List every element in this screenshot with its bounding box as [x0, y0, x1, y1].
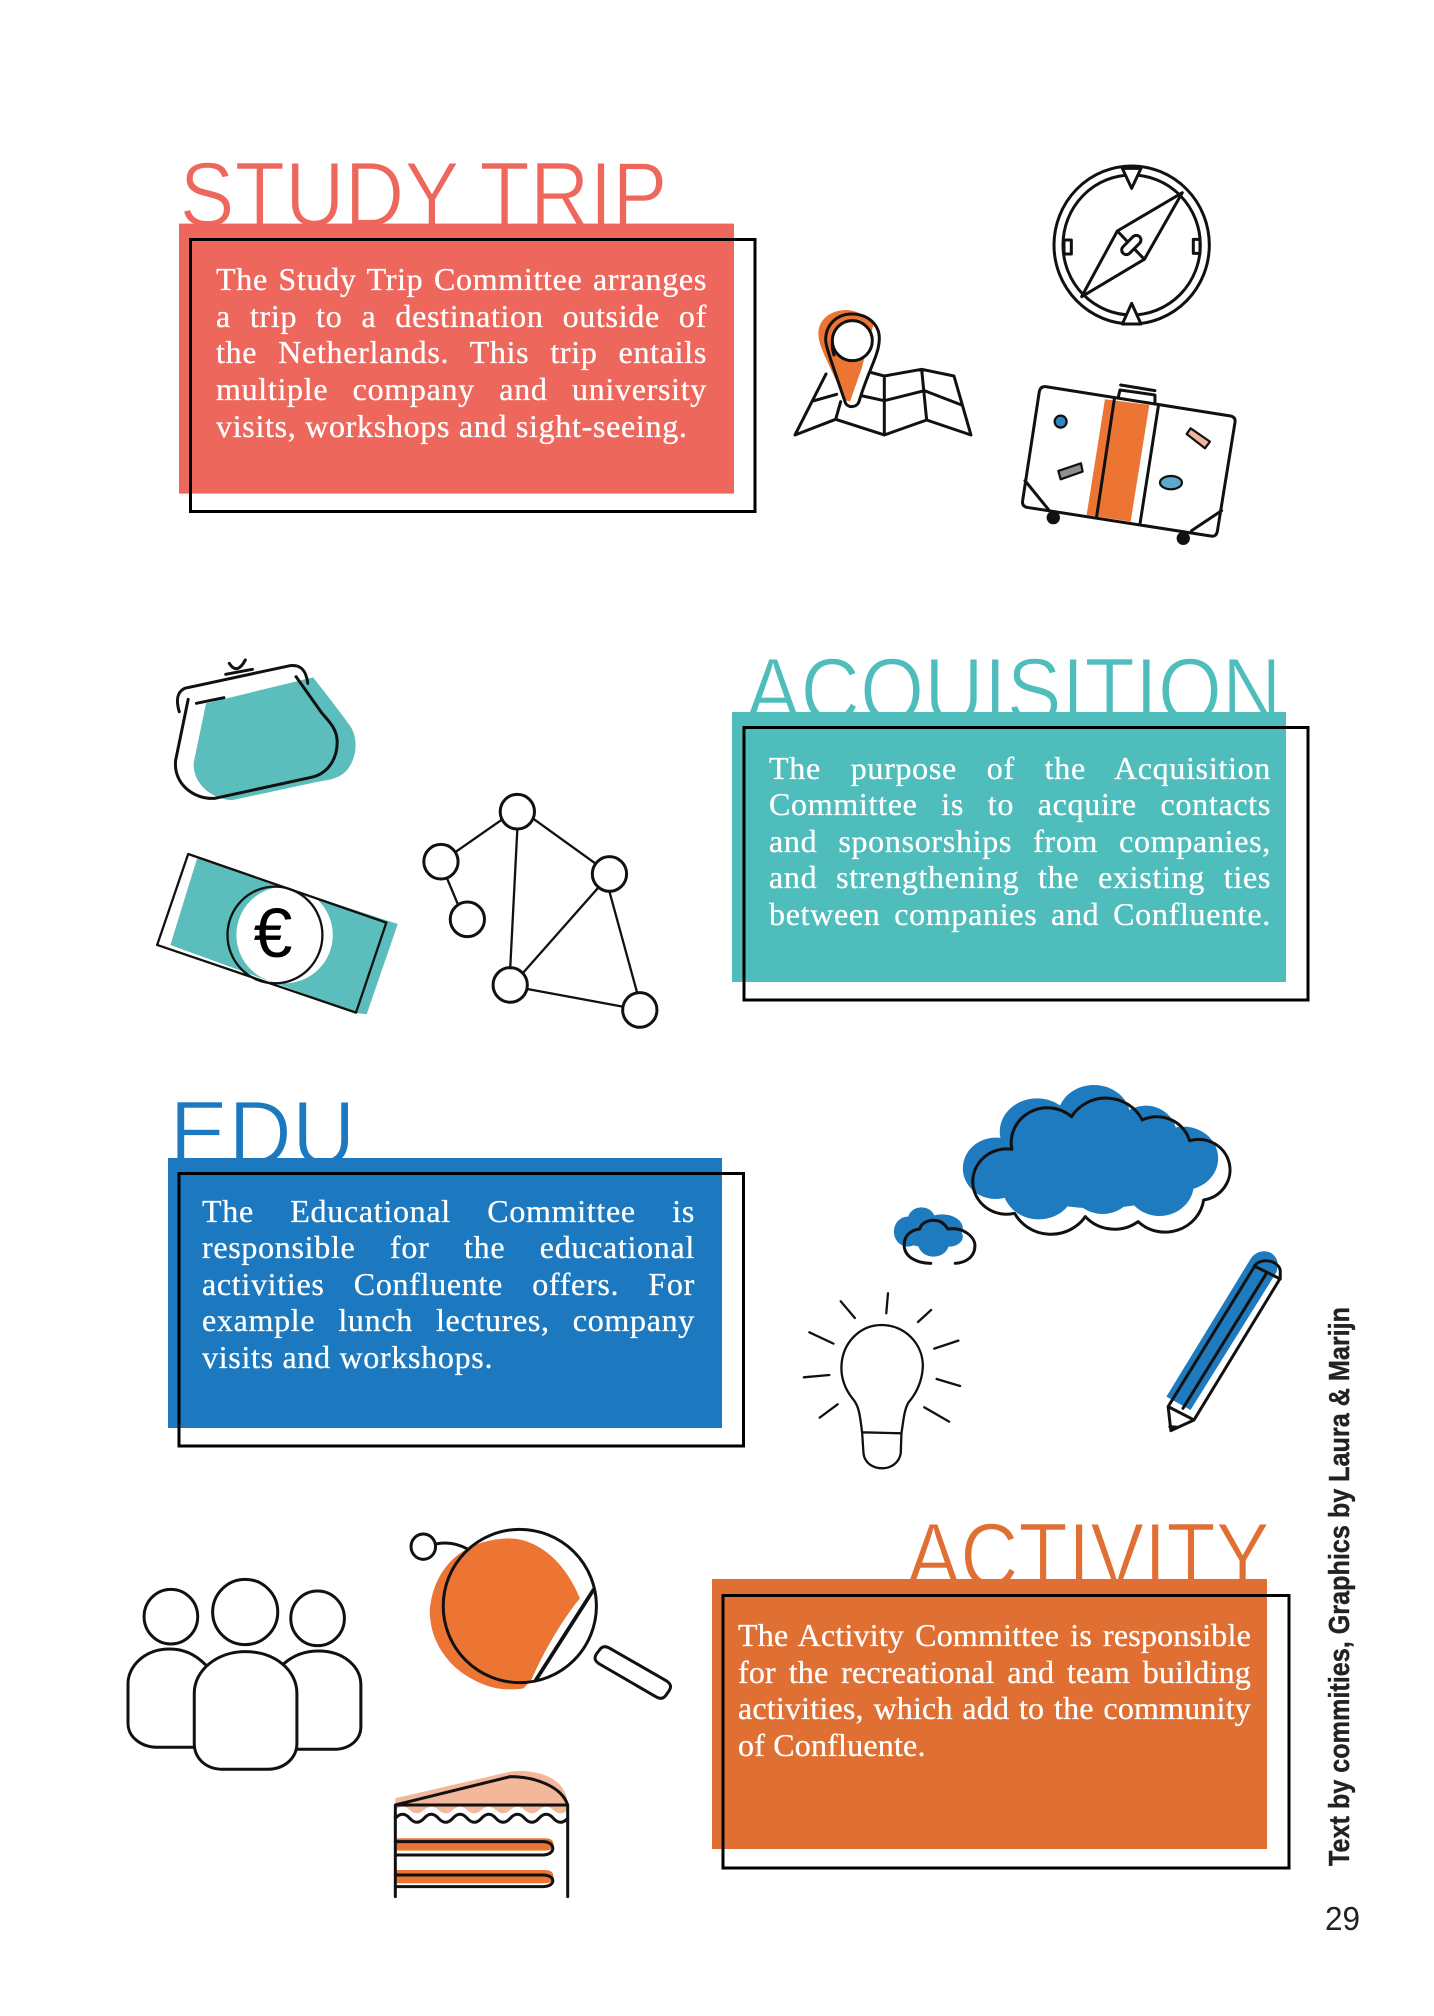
- icon: pencil: [1166, 1251, 1280, 1431]
- edu text: responsible for the educational: [202, 1229, 695, 1265]
- activity outline frame: [723, 1596, 1289, 1868]
- icon: slice of cake: [395, 1771, 568, 1897]
- euro symbol: €: [254, 894, 292, 972]
- study trip text: [216, 261, 707, 451]
- panel: acquisition: [732, 640, 1308, 1000]
- panel: activity: [712, 1505, 1289, 1868]
- icon: suitcase: [1022, 385, 1235, 545]
- edu text: visits and workshops.: [202, 1339, 493, 1375]
- heading: edu: EDU: [170, 1083, 356, 1185]
- panel: study trip: [179, 144, 755, 512]
- edu outline frame: [179, 1174, 744, 1446]
- edu colour box: [168, 1158, 722, 1428]
- icon: compass: [1054, 166, 1209, 324]
- edu text: activities Confluente offers. For: [202, 1266, 695, 1302]
- acquisition colour box: [732, 712, 1286, 982]
- activity text: for the recreational and team building: [738, 1654, 1251, 1690]
- icon: magnifying glass: [411, 1529, 671, 1698]
- activity text: activities, which add to the community: [738, 1690, 1251, 1726]
- icon: big thought cloud: [963, 1085, 1230, 1234]
- acquisition text: and sponsorships from companies,: [769, 823, 1271, 859]
- heading: activity: ACTIVITY: [906, 1505, 1270, 1607]
- page number: 29: [1325, 1900, 1360, 1937]
- activity text: [738, 1617, 1251, 1777]
- acquisition text: Committee is to acquire contacts: [769, 786, 1271, 822]
- acquisition text: between companies and Confluente.: [769, 896, 1271, 932]
- panel: edu: [168, 1083, 744, 1446]
- activity text: The Activity Committee is responsible: [738, 1617, 1251, 1653]
- acquisition text: The purpose of the Acquisition: [769, 750, 1271, 786]
- icon: small thought cloud: [894, 1207, 975, 1263]
- study trip outline frame: [190, 240, 755, 512]
- edu text: [202, 1192, 695, 1382]
- study trip text: visits, workshops and sight-seeing.: [216, 408, 688, 444]
- study trip text: the Netherlands. This trip entails: [216, 334, 707, 370]
- edu text: The Educational Committee is: [202, 1192, 695, 1228]
- study trip text: multiple company and university: [216, 371, 707, 407]
- icon: group of people: [128, 1579, 361, 1769]
- study trip text: The Study Trip Committee arranges: [216, 261, 707, 297]
- heading: acquisition: ACQUISITION: [746, 640, 1282, 742]
- acquisition text: [769, 750, 1271, 940]
- icon: purse: [175, 660, 356, 800]
- icon: network diagram: [424, 794, 657, 1027]
- acquisition outline frame: [744, 728, 1308, 1000]
- edu text: example lunch lectures, company: [202, 1302, 695, 1338]
- activity colour box: [712, 1579, 1267, 1849]
- acquisition text: and strengthening the existing ties: [769, 859, 1271, 895]
- icon: light bulb: [804, 1293, 960, 1468]
- heading: study trip: STUDY TRIP: [180, 144, 668, 246]
- study trip text: a trip to a destination outside of: [216, 298, 707, 334]
- activity text: of Confluente.: [738, 1727, 926, 1763]
- credits: vertical text: Text by commities, Graphics by Laura & Marijn: [1324, 1307, 1356, 1866]
- icon: map with pin: [795, 310, 971, 435]
- icon: euro banknote: [157, 854, 398, 1014]
- study trip colour box: [179, 224, 734, 494]
